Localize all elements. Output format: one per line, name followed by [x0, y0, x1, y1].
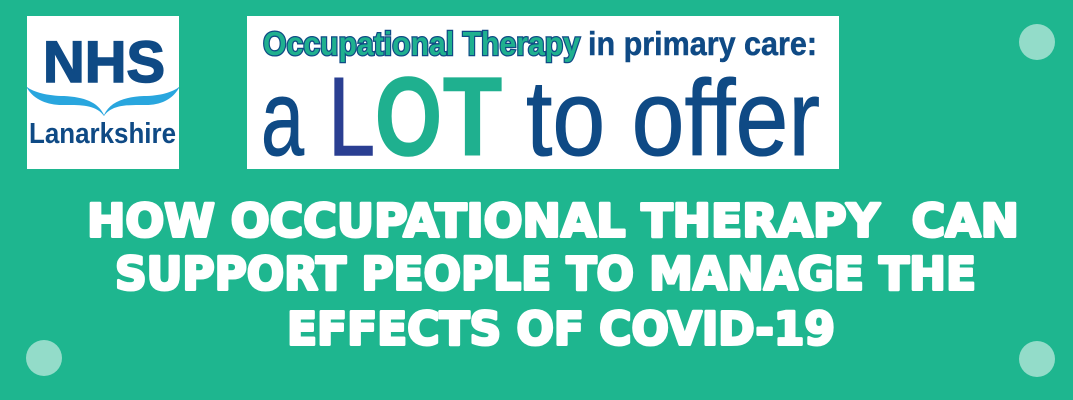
banner text: in primary care: in primary care:	[588, 25, 817, 62]
logo text: NHS: NHS	[43, 30, 165, 95]
heading: how occupational therapy can support people: EFFECTS OF COVID-19	[287, 302, 835, 356]
banner text: a LOT to offer: T	[443, 55, 502, 179]
banner text: a LOT to offer: a	[261, 57, 305, 178]
heading: how occupational therapy can support people	[87, 194, 1019, 356]
decorative circle: top right	[1019, 24, 1055, 60]
banner text: a LOT to offer	[261, 55, 820, 179]
heading: how occupational therapy can support people: HOW OCCUPATIONAL THERAPY CAN	[87, 194, 1019, 248]
banner: Occupational Therapy in primary care	[247, 16, 839, 179]
banner text: a LOT to offer: L	[328, 55, 375, 179]
decorative circle: bottom left	[26, 340, 62, 376]
icon: blue wave	[27, 87, 179, 116]
banner text: a LOT to offer: to offer	[526, 57, 820, 178]
banner text: Occupational Therapy: Occupational Therapy	[263, 25, 581, 62]
logo text: Lanarkshire: Lanarkshire	[29, 118, 176, 150]
banner text: a LOT to offer: O	[375, 55, 442, 179]
heading: how occupational therapy can support people: SUPPORT PEOPLE TO MANAGE THE	[115, 248, 976, 300]
NHS Lanarkshire logo	[27, 16, 179, 169]
decorative circle: bottom right	[1019, 341, 1055, 377]
